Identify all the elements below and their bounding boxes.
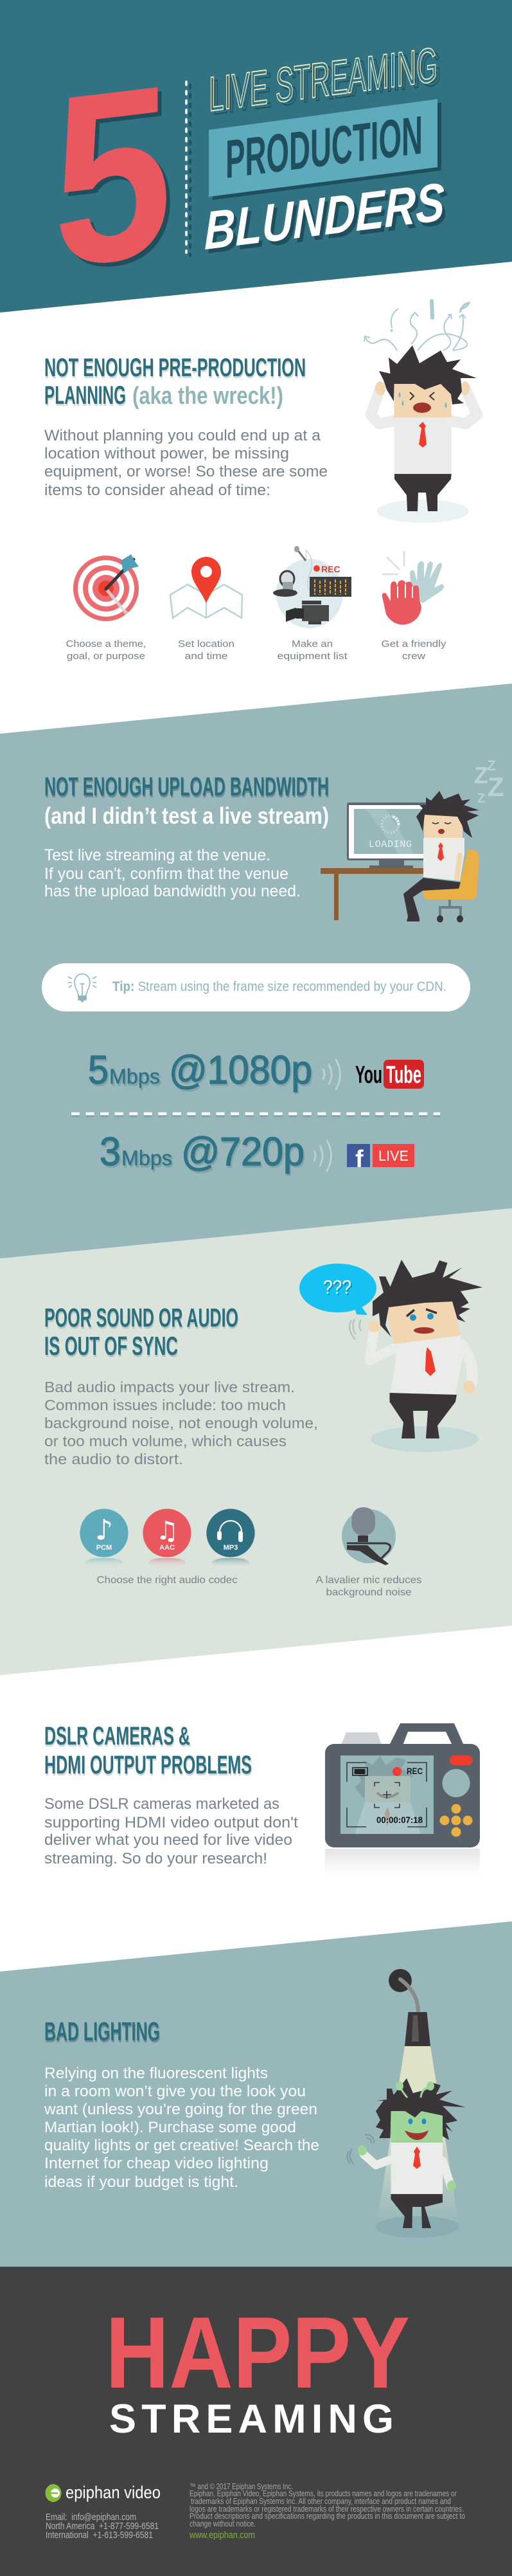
body text: in a room won’t give you the look you: [44, 2083, 306, 2100]
body text: or too much volume, which causes: [44, 1433, 287, 1449]
sleeping zzz: Z: [474, 762, 488, 788]
callout: tip: [42, 963, 470, 1011]
body text: [44, 2065, 319, 2191]
body text: items to consider ahead of time:: [44, 482, 270, 499]
panel: dslr cameras: [44, 1722, 480, 1874]
illustration: chair: [423, 850, 479, 922]
heading: (and I didn’t test a live stream): [44, 803, 329, 829]
closing title: STREAMING: [109, 2397, 394, 2442]
heading: HDMI OUTPUT PROBLEMS: [45, 1753, 252, 1781]
speech bubble: [299, 1264, 376, 1315]
closing title: [105, 2296, 410, 2442]
stat: 3 mbps at 720p: Mbps: [123, 1148, 173, 1172]
character: confused man: [349, 1260, 482, 1452]
stat: 3 mbps at 720p: [100, 1130, 414, 1176]
icon captions: goal, or purpose: [67, 651, 145, 662]
title line: blunders: BLUNDERS: [204, 171, 445, 261]
body text: quality lights or get creative! Search the: [44, 2137, 319, 2154]
body text: supporting HDMI video output don't: [44, 1814, 298, 1831]
icon: equipment list: [273, 546, 351, 628]
icon: sound arcs: [314, 1141, 331, 1171]
body text: want (unless you’re going for the green: [44, 2101, 317, 2118]
heading: NOT ENOUGH PRE-PRODUCTION: [44, 354, 306, 382]
stat: 3 mbps at 720p: @720p: [182, 1132, 306, 1176]
sleeping zzz: Z: [488, 772, 504, 802]
body text: If you can't, confirm that the venue: [44, 865, 288, 883]
stat: 3 mbps at 720p: Mbps: [121, 1147, 172, 1170]
codec icons: [80, 1509, 255, 1568]
body text: [44, 1379, 318, 1467]
closing title: HAPPY: [105, 2296, 410, 2409]
illustration: camera: REC: [407, 1766, 423, 1776]
icon: mp3: [206, 1509, 255, 1568]
legal text: Epiphan, Epiphan Video, Epiphan Systems, its products names and logos are tradenames or: [190, 2489, 457, 2498]
body text: Internet for cheap video lighting: [44, 2155, 269, 2172]
logo: youtube: Tube: [386, 1062, 421, 1089]
camera screen subject: [355, 1755, 421, 1834]
body text: [44, 846, 301, 900]
legal text: logos are trademarks or registered trademarks of their respective owners in certain countries.: [190, 2505, 464, 2514]
legal text: ™ and © 2017 Epiphan Systems Inc.: [190, 2482, 293, 2491]
stat: 5 mbps at 1080p: 5: [88, 1048, 109, 1093]
icon: pcm: PCM: [96, 1544, 112, 1552]
body text: the audio to distort.: [44, 1451, 183, 1467]
caption: lavalier: A lavalier mic reduces: [316, 1575, 421, 1586]
icon: map pin: [170, 557, 242, 618]
title line: live streaming: [209, 37, 441, 125]
heading: PLANNING: [44, 381, 126, 410]
heading: POOR SOUND OR AUDIO: [44, 1303, 238, 1332]
heading: DSLR CAMERAS &: [44, 1722, 190, 1750]
icon: light bulb: [68, 974, 96, 1002]
heading: [44, 1303, 239, 1363]
logo: facebook live: f: [355, 1146, 364, 1173]
icon: sound arcs: [323, 1060, 340, 1089]
squiggle arrows: [364, 301, 469, 350]
icon captions: and time: [185, 651, 227, 662]
dotted divider: [186, 82, 190, 256]
icon: mp3: MP3: [224, 1544, 238, 1552]
heading: IS OUT OF SYNC: [45, 1333, 179, 1363]
body text: [44, 1795, 298, 1867]
title line: blunders: BLUNDERS: [207, 175, 448, 265]
contact details: Email: info@epiphan.com: [46, 2512, 136, 2523]
stat: 3 mbps at 720p: @720p: [181, 1130, 305, 1174]
body text: Test live streaming at the venue.: [44, 846, 270, 864]
illustration: camera: 00:00:07:18: [376, 1815, 423, 1825]
stat: 5 mbps at 1080p: Mbps: [110, 1067, 161, 1090]
icon: target: [73, 554, 139, 621]
character: sleeping man: [403, 791, 479, 921]
body text: Some DSLR cameras marketed as: [44, 1795, 279, 1813]
sleeping zzz: [474, 757, 504, 806]
icon captions: equipment list: [278, 651, 348, 662]
contact details: North America +1-877-599-6581: [46, 2521, 159, 2532]
icon: high five: [382, 551, 444, 624]
logo: youtube: [355, 1060, 424, 1089]
icon captions: Choose a theme,: [66, 639, 146, 649]
icon captions: Get a friendly: [382, 639, 446, 649]
logo: facebook live: [347, 1144, 414, 1173]
illustration: desk and monitor: [321, 803, 427, 920]
heading: BAD LIGHTING: [44, 2017, 160, 2046]
panel: upload bandwidth: [42, 757, 504, 1176]
heading: (aka the wreck!): [132, 383, 283, 410]
sleeping zzz: Z: [487, 757, 495, 774]
caption: codec: Choose the right audio codec: [96, 1575, 238, 1586]
icon: aac: ♫: [155, 1516, 179, 1546]
legal text: trademarks of Epiphan Systems Inc. All other company, interface and product names and: [191, 2497, 451, 2506]
stat: 5 mbps at 1080p: @1080p: [170, 1050, 313, 1094]
panel: footer: [0, 2267, 512, 2576]
icon row: [73, 546, 444, 628]
heading: POOR SOUND OR AUDIO: [45, 1305, 239, 1334]
body text: Without planning you could end up at a: [44, 427, 321, 444]
caption: lavalier: [316, 1575, 421, 1598]
body text: Martian look!). Purchase some good: [44, 2119, 296, 2136]
body text: ideas if your budget is tight.: [44, 2173, 238, 2191]
icon: pcm: ♪: [95, 1514, 113, 1547]
caption: lavalier: background noise: [326, 1587, 412, 1598]
contact details: International +1-613-599-6581: [46, 2530, 153, 2541]
body text: has the upload bandwidth you need.: [44, 882, 301, 900]
icon: aac: AAC: [159, 1544, 175, 1552]
body text: Relying on the fluorescent lights: [44, 2065, 268, 2082]
stat: 3 mbps at 720p: 3: [100, 1130, 121, 1174]
body text: background noise, not enough volume,: [44, 1415, 318, 1431]
icon captions: crew: [402, 651, 425, 662]
icon: equipment list: REC: [321, 564, 340, 574]
heading: NOT ENOUGH UPLOAD BANDWIDTH: [45, 774, 330, 803]
icon captions: Make an: [292, 639, 333, 649]
legal text: [190, 2482, 465, 2528]
body text: deliver what you need for live video: [44, 1831, 292, 1849]
logo: epiphan video: epiphan video: [66, 2483, 161, 2502]
heading: [44, 1722, 252, 1781]
icon captions: Set location: [178, 639, 234, 649]
body text: [44, 427, 328, 499]
heading: [44, 2017, 161, 2048]
logo: youtube: You: [355, 1062, 382, 1089]
heading: NOT ENOUGH PRE-PRODUCTION: [45, 356, 306, 384]
legal text: change without notice.: [190, 2519, 256, 2528]
big number 5: 5: [57, 37, 176, 322]
big number 5: 5: [53, 33, 172, 318]
body text: location without power, be missing: [44, 445, 289, 462]
stat: 5 mbps at 1080p: Mbps: [109, 1065, 160, 1088]
stat: 5 mbps at 1080p: @1080p: [169, 1048, 312, 1093]
title line: production: [209, 99, 441, 200]
body text: streaming. So do your research!: [44, 1850, 267, 1867]
illustration: camera: [325, 1723, 480, 1874]
heading: BAD LIGHTING: [45, 2018, 161, 2048]
logo: facebook live: LIVE: [378, 1148, 409, 1164]
character: green martian man: [347, 2078, 465, 2238]
body text: Bad audio impacts your live stream.: [44, 1379, 295, 1395]
illustration: lamp: [377, 1969, 459, 2223]
heading: NOT ENOUGH UPLOAD BANDWIDTH: [44, 772, 329, 801]
character: stressed man: [371, 345, 477, 523]
icon: aac: [143, 1509, 191, 1568]
speech bubble: ???: [324, 1277, 353, 1300]
stat: 5 mbps at 1080p: [88, 1048, 424, 1094]
sleeping zzz: Z: [477, 792, 485, 806]
stat: 5 mbps at 1080p: 5: [89, 1050, 110, 1094]
body text: equipment, or worse! So these are some: [44, 463, 328, 480]
callout: tip: Tip: Stream using the frame size recommended by your CDN.: [112, 979, 446, 994]
speech bubble: ???: [323, 1276, 351, 1298]
heading: PLANNING: [45, 383, 127, 412]
dashed divider: [71, 1114, 440, 1116]
panel: header: [0, 0, 512, 322]
heading: DSLR CAMERAS &: [45, 1724, 191, 1752]
icon captions: [66, 639, 446, 662]
website: www.epiphan.com: [189, 2530, 255, 2541]
panel: pre-production planning: [44, 301, 477, 662]
icon: pcm: [80, 1509, 128, 1568]
panel: poor sound: [44, 1260, 482, 1598]
panel: bad lighting: [44, 1969, 465, 2238]
icon: lavalier mic: [342, 1507, 396, 1565]
heading: [44, 772, 330, 829]
body text: Common issues include: too much: [44, 1397, 286, 1413]
contact details: [46, 2512, 159, 2541]
heading: [44, 354, 306, 412]
heading: IS OUT OF SYNC: [44, 1331, 178, 1361]
illustration: desk and monitor: LOADING: [369, 839, 412, 850]
heading: HDMI OUTPUT PROBLEMS: [44, 1751, 252, 1779]
stat: 3 mbps at 720p: 3: [101, 1132, 122, 1176]
